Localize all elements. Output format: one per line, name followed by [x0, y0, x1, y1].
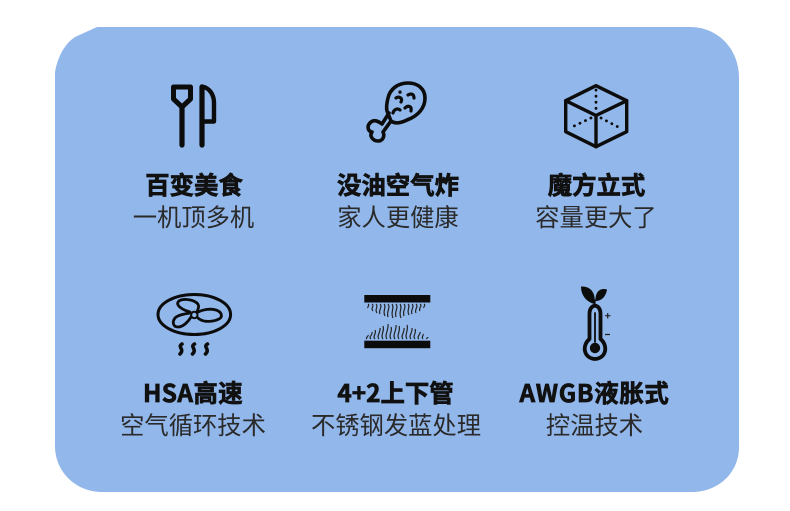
feature: 4+2 heating tubes [311, 295, 481, 441]
feature: AWGB thermostat [518, 286, 670, 441]
icon: fan with heat waves [158, 294, 231, 354]
text: 不锈钢发蓝处理 [311, 406, 481, 441]
text: 家人更健康 [337, 198, 459, 233]
icon: chicken drumstick [368, 83, 425, 141]
feature: cube capacity [535, 86, 657, 233]
heading: 百变美食 [145, 167, 243, 202]
icon: spatula and knife [174, 86, 214, 145]
icon: thermometer with leaves [581, 286, 610, 359]
text: 一机顶多机 [133, 198, 254, 233]
heading: 4+2上下管 [337, 375, 454, 410]
feature: food [133, 86, 254, 233]
text: 容量更大了 [535, 198, 657, 233]
feature: oil-free frying [337, 83, 459, 233]
feature: HSA fan [120, 294, 266, 441]
panel: blue background [55, 27, 739, 492]
text: 空气循环技术 [120, 406, 266, 441]
heading: HSA高速 [143, 375, 243, 410]
heading: 魔方立式 [548, 167, 645, 202]
heading: 没油空气炸 [337, 167, 459, 202]
text: 控温技术 [546, 406, 643, 441]
icon: heating tubes [364, 295, 430, 348]
heading: AWGB液胀式 [518, 375, 670, 410]
icon: cube [566, 86, 627, 147]
